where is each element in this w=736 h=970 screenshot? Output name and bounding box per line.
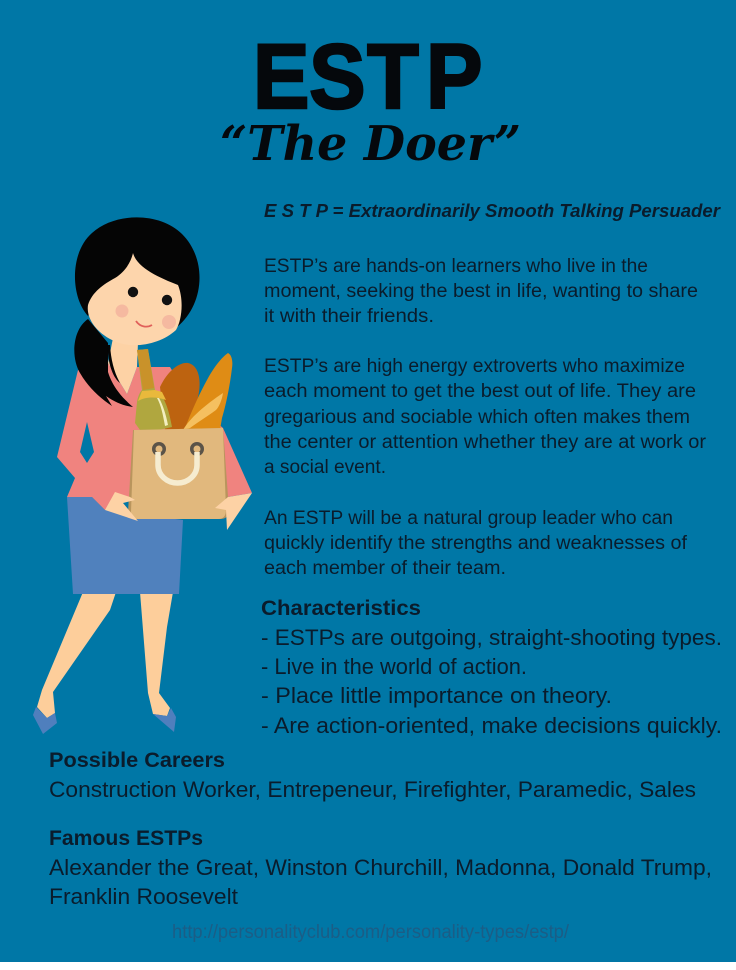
paragraph 1 <box>264 256 698 327</box>
tagline: E S T P = Extraordinarily Smooth Talking Persuader <box>264 201 721 221</box>
paragraph 2: each moment to get the best out of life. They are <box>264 381 696 402</box>
paragraph 2: the center or attention whether they are at work or <box>264 432 707 453</box>
source url: http://personalityclub.com/personality-types/estp/ <box>172 922 570 943</box>
possible careers <box>49 749 696 802</box>
paragraph 2: gregarious and sociable which often makes them <box>264 407 690 428</box>
skirt <box>67 497 183 594</box>
neck <box>108 338 138 394</box>
paragraph 1: it with their friends. <box>264 306 434 327</box>
title: ESTP <box>253 25 482 128</box>
left hand <box>105 492 138 521</box>
face <box>88 253 182 345</box>
hair <box>75 217 200 327</box>
paragraph 2: ESTP’s are high energy extroverts who maximize <box>264 356 685 377</box>
characteristics: - Place little importance on theory. <box>261 683 612 708</box>
ponytail <box>74 319 133 407</box>
baguette <box>182 353 232 436</box>
bottle label <box>138 390 166 401</box>
baguette score <box>183 393 223 430</box>
possible careers: Construction Worker, Entrepeneur, Firefighter, Paramedic, Sales <box>49 777 696 802</box>
left leg <box>37 592 116 718</box>
ponytail strand <box>108 345 120 383</box>
paragraph 3: quickly identify the strengths and weaknesses of <box>264 533 688 554</box>
characteristics: Characteristics <box>261 597 421 620</box>
smile <box>136 321 152 327</box>
paragraph 3: An ESTP will be a natural group leader who can <box>264 508 673 529</box>
paragraph 3: each member of their team. <box>264 558 506 579</box>
bag <box>128 428 229 519</box>
characteristics: - Are action-oriented, make decisions quickly. <box>261 713 722 738</box>
left shoe <box>33 707 57 734</box>
characteristics: - ESTPs are outgoing, straight-shooting types. <box>261 625 722 650</box>
famous ESTPs: Franklin Roosevelt <box>49 884 238 909</box>
characteristics <box>261 597 722 738</box>
right shoe <box>153 708 176 732</box>
title: “The Doer” <box>220 116 521 172</box>
cheeks <box>116 304 176 329</box>
paragraph 3 <box>264 508 688 579</box>
possible careers: Possible Careers <box>49 749 225 772</box>
bag handle <box>152 442 204 483</box>
illustration: woman holding grocery bag <box>33 217 252 734</box>
right leg <box>140 592 173 716</box>
paragraph 2 <box>264 356 707 478</box>
famous ESTPs: Alexander the Great, Winston Churchill, Madonna, Donald Trump, <box>49 855 712 880</box>
bottle neck foil <box>137 349 154 390</box>
round bread <box>160 363 200 436</box>
bottle highlight <box>157 398 168 426</box>
arm gap <box>80 422 94 463</box>
famous ESTPs: Famous ESTPs <box>49 827 203 850</box>
paragraph 2: a social event. <box>264 457 386 478</box>
wine bottle <box>135 349 172 432</box>
paragraph 1: moment, seeking the best in life, wanting to share <box>264 281 698 302</box>
eyes <box>128 287 172 305</box>
right hand <box>215 493 252 530</box>
characteristics: - Live in the world of action. <box>261 654 527 679</box>
title <box>220 25 521 172</box>
famous ESTPs <box>49 827 712 909</box>
paragraph 1: ESTP’s are hands-on learners who live in the <box>264 256 648 277</box>
shirt <box>57 363 252 510</box>
